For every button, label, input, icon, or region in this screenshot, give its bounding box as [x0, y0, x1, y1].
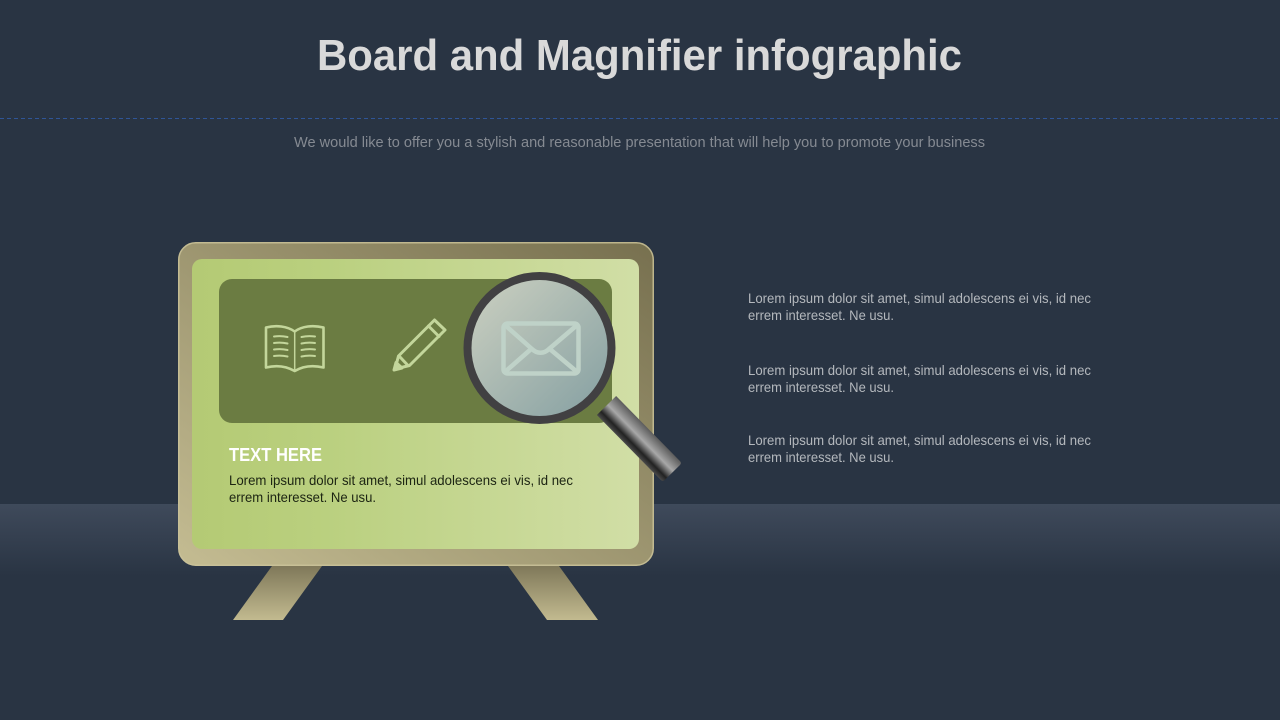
left leg — [233, 566, 322, 620]
board text: Lorem ipsum dolor sit amet, simul adolescens ei vis, id nec — [229, 472, 573, 488]
subtitle: We would like to offer you a stylish and reasonable presentation that will help you to promote your business — [294, 135, 985, 151]
text block 1 — [748, 290, 1091, 323]
text block 1: errem interesset. Ne usu. — [748, 307, 894, 323]
text block 3 — [748, 432, 1091, 465]
text block 3: Lorem ipsum dolor sit amet, simul adolescens ei vis, id nec — [748, 432, 1091, 448]
magnifier handle — [597, 396, 682, 482]
icon panel — [219, 279, 612, 423]
text block 2: Lorem ipsum dolor sit amet, simul adolescens ei vis, id nec — [748, 362, 1091, 378]
icon: open book — [266, 326, 324, 371]
magnifier lens — [468, 276, 612, 420]
text heading: TEXT HERE — [229, 445, 322, 465]
board text: errem interesset. Ne usu. — [229, 489, 376, 505]
icon: pencil — [394, 320, 445, 370]
text block 1: Lorem ipsum dolor sit amet, simul adolescens ei vis, id nec — [748, 290, 1091, 306]
board frame — [179, 243, 653, 565]
magnifier — [468, 276, 682, 482]
text block 2 — [748, 362, 1091, 395]
title: Board and Magnifier infographic — [317, 31, 962, 80]
text block 3: errem interesset. Ne usu. — [748, 449, 894, 465]
right leg — [508, 566, 598, 620]
board screen — [192, 259, 639, 549]
board text — [229, 472, 573, 505]
board with stand — [179, 243, 653, 620]
text block 2: errem interesset. Ne usu. — [748, 379, 894, 395]
icon: envelope — [504, 324, 578, 374]
